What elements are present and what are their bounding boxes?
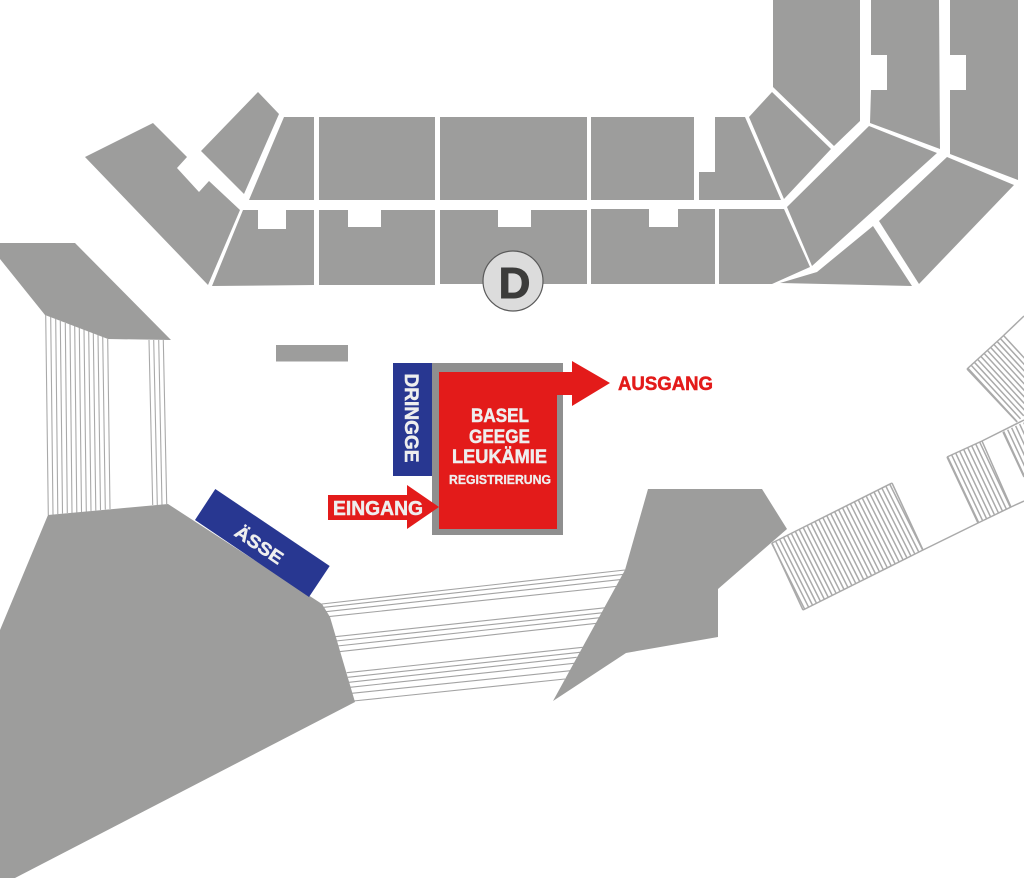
stairs: right side steps <box>772 316 1024 610</box>
sector marker D <box>483 251 543 311</box>
tent label: BASEL <box>471 406 529 427</box>
stairs: lower middle steps <box>322 570 625 701</box>
tent label <box>449 406 551 487</box>
exit sign: ÄSSE <box>195 489 330 597</box>
stairs: left vertical steps <box>46 315 167 515</box>
entrance arrow: EINGANG: EINGANG <box>333 498 423 520</box>
grey block: lower centre <box>553 489 787 701</box>
sign: DRINGGE <box>393 363 432 476</box>
tent label: LEUKÄMIE <box>452 447 547 468</box>
tent label: REGISTRIERUNG <box>449 473 551 487</box>
sector marker D: D <box>499 259 530 308</box>
grey block: lower left <box>0 504 355 878</box>
sign: DRINGGE: DRINGGE <box>400 374 421 462</box>
tent label: GEEGE <box>469 427 530 448</box>
registration tent <box>432 361 610 535</box>
grey block: upper left <box>0 243 171 340</box>
entrance arrow: EINGANG <box>328 485 439 529</box>
seating blocks: upper stand <box>85 0 1018 286</box>
red tent with exit arrow <box>439 361 610 529</box>
label: AUSGANG: AUSGANG <box>618 374 713 395</box>
exit sign: ÄSSE: ÄSSE <box>231 522 287 568</box>
small grey block <box>276 345 348 362</box>
